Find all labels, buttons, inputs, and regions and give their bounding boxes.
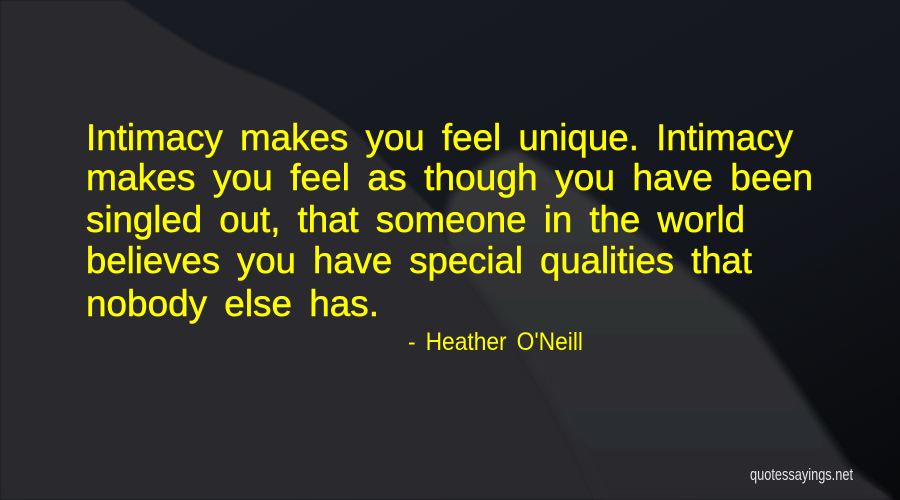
quote text	[86, 117, 813, 324]
quote line 4: believes you have special qualities that	[86, 240, 753, 281]
attribution: - Heather O'Neill	[408, 328, 583, 356]
background: mountain peak	[445, 150, 893, 500]
quote line 1: Intimacy makes you feel unique. Intimacy	[86, 117, 793, 158]
quote line 3: singled out, that someone in the world	[86, 199, 745, 240]
quote line 5: nobody else has.	[86, 283, 379, 324]
quote line 2: makes you feel as though you have been	[86, 157, 813, 198]
watermark: quotessayings.net	[750, 465, 853, 484]
